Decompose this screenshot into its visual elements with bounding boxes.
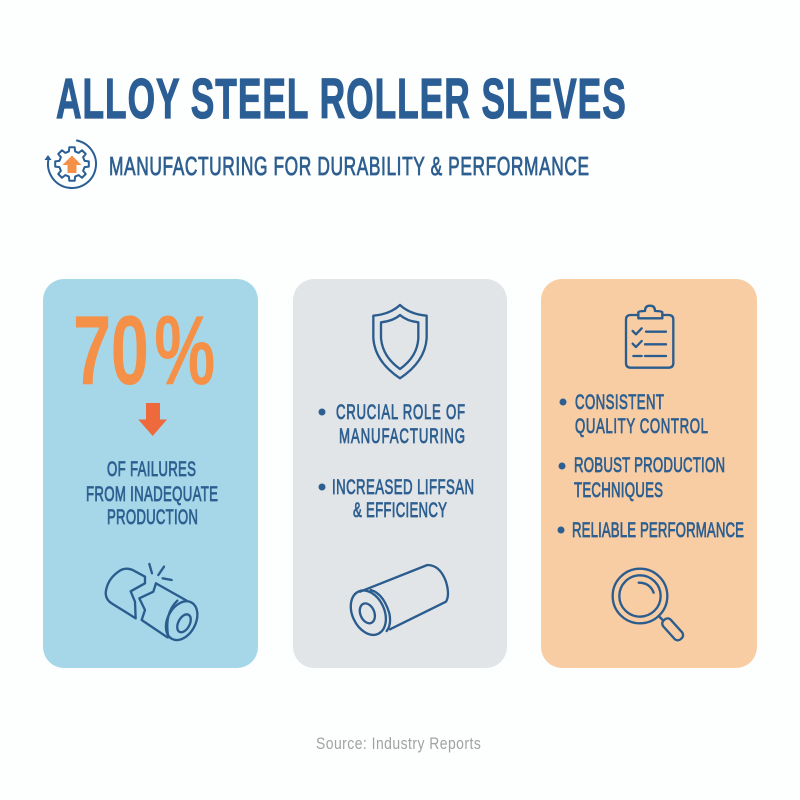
- title: ALLOY STEEL ROLLER SLEVES: [56, 68, 626, 131]
- bullet: quality control: QUALITY CONTROL: [575, 414, 708, 438]
- bullet: crucial role: CRUCIAL ROLE OF: [336, 400, 465, 424]
- panel: failures: [43, 279, 258, 668]
- icon: shield: [373, 305, 427, 378]
- text: failures description: [86, 457, 218, 529]
- icon: magnifying glass: [613, 569, 685, 642]
- panel: quality: [541, 279, 757, 668]
- stat: 70%: 70%: [73, 295, 215, 405]
- bullet: lifespan: & EFFICIENCY: [353, 498, 447, 522]
- bullet: lifespan: [318, 475, 474, 522]
- text: failures description: PRODUCTION: [107, 505, 198, 529]
- bullet: robust production: ROBUST PRODUCTION: [574, 453, 725, 477]
- bullet: reliable performance: RELIABLE PERFORMANCE: [572, 518, 744, 542]
- subtitle: MANUFACTURING FOR DURABILITY & PERFORMANCE: [109, 152, 589, 181]
- bullet: quality control: [560, 390, 708, 438]
- bullet: robust production: TECHNIQUES: [574, 478, 663, 502]
- icon: roller sleeve: [344, 565, 448, 641]
- text: failures description: FROM INADEQUATE: [86, 482, 218, 506]
- bullet: crucial role: [318, 400, 465, 448]
- panel: manufacturing role: [293, 279, 507, 668]
- source note: Source: Industry Reports: [316, 735, 481, 753]
- icon: clipboard checklist: [626, 306, 673, 368]
- bullet: quality control: CONSISTENT: [575, 390, 664, 414]
- icon: cracked roller: [106, 564, 204, 645]
- bullet: crucial role: MANUFACTURING: [339, 424, 465, 448]
- bullet: lifespan: INCREASED LIFFSAN: [332, 475, 474, 499]
- bullet: robust production: [558, 453, 725, 502]
- text: failures description: OF FAILURES: [107, 457, 196, 481]
- icon: down arrow: [138, 403, 167, 436]
- icon: gear with upward arrow: [44, 136, 100, 192]
